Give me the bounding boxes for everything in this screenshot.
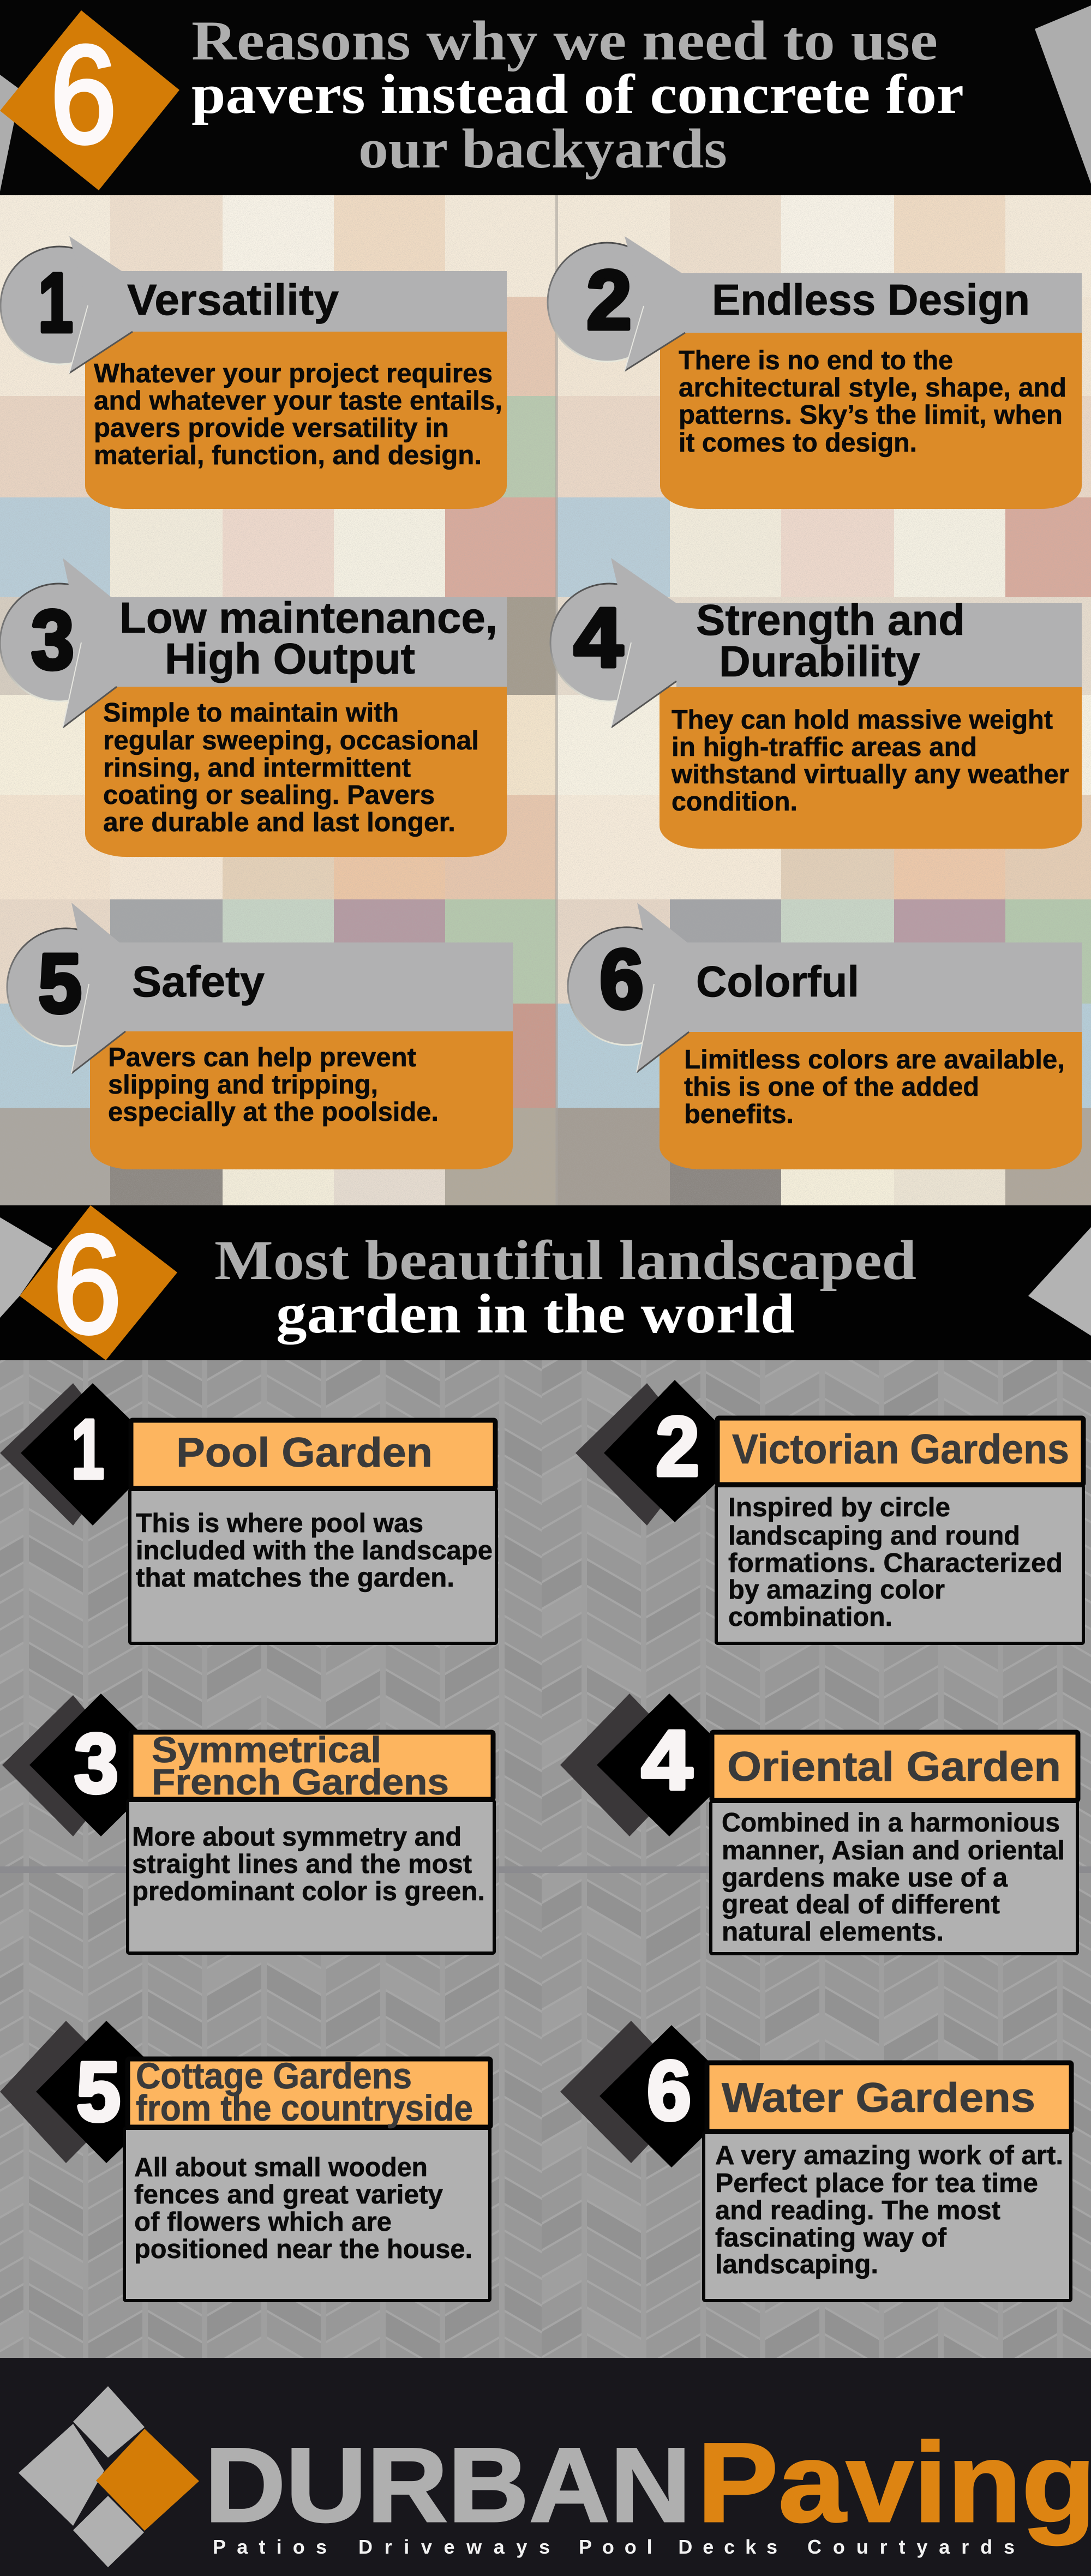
text block: great deal of different <box>722 1890 1000 1919</box>
header banner: 6 reasons <box>0 0 1091 195</box>
text block: Combined in a harmonious <box>722 1808 1060 1838</box>
decorative grey corner right <box>1028 1227 1091 1336</box>
text block: and whatever your taste entails, <box>94 386 502 416</box>
tagline: Courtyards <box>807 2536 1015 2558</box>
title: pavers instead of concrete for <box>191 63 964 125</box>
tile background: coloured pavers <box>0 195 1091 1207</box>
text block: manner, Asian and oriental <box>722 1836 1065 1865</box>
panel: garden 4 oriental garden <box>560 1694 1078 1954</box>
panel: garden 6 water gardens: Water Gardens <box>722 2075 1035 2121</box>
text block: gardens make use of a <box>722 1863 1008 1893</box>
icon: orange diamond with 6: 6 <box>50 17 117 172</box>
panel: garden 2 victorian gardens: Victorian Gardens <box>732 1426 1069 1473</box>
text block <box>679 346 1066 458</box>
text block <box>108 1043 439 1127</box>
text block <box>134 2153 472 2264</box>
panel: reason 5 safety: 5 <box>38 936 82 1030</box>
text block: landscaping and round <box>728 1521 1020 1551</box>
text block: benefits. <box>684 1100 794 1129</box>
panel: reason 6 colorful: Colorful <box>696 957 859 1006</box>
chevron paver background <box>0 1360 1091 2358</box>
panel: reason 4 strength and durability <box>550 558 1082 849</box>
title <box>191 10 964 180</box>
wordmark: DURBAN <box>205 2426 691 2544</box>
text block: natural elements. <box>722 1917 944 1947</box>
text block: are durable and last longer. <box>103 808 455 837</box>
text block: Inspired by circle <box>728 1493 950 1522</box>
panel: reason 4 strength and durability: Durability <box>719 637 921 686</box>
header banner: 6 gardens <box>0 1205 1091 1362</box>
panel: reason 3 low maintenance: 3 <box>31 593 74 687</box>
wordmark: Paving <box>697 2419 1091 2545</box>
title: garden in the world <box>276 1283 795 1345</box>
title: Reasons why we need to use <box>191 10 938 72</box>
panel: garden 5 cottage gardens <box>0 2021 490 2301</box>
text block <box>684 1045 1065 1129</box>
panel: garden 3 symmetrical french gardens <box>2 1694 494 1953</box>
footer: Durban Paving logo <box>0 2358 1091 2576</box>
text block: This is where pool was <box>136 1509 423 1538</box>
decorative grey corner left <box>0 75 21 191</box>
text block: positioned near the house. <box>134 2235 472 2264</box>
title: our backyards <box>358 118 727 180</box>
text block <box>728 1493 1063 1632</box>
text block: straight lines and the most <box>132 1850 472 1879</box>
title: Most beautiful landscaped <box>214 1229 916 1292</box>
text block: by amazing color <box>728 1575 945 1605</box>
panel: garden 2 victorian gardens <box>576 1380 1083 1643</box>
panel: reason 6 colorful: 6 <box>600 932 644 1026</box>
text block: it comes to design. <box>679 428 917 458</box>
panel: reason 3 low maintenance: Low maintenance, <box>119 593 497 642</box>
tagline: Pool Decks <box>579 2536 777 2558</box>
panel: garden 1 pool garden: Pool Garden <box>176 1430 433 1476</box>
text block: Simple to maintain with <box>103 698 399 728</box>
panel: garden 5 cottage gardens: from the countryside <box>136 2088 473 2129</box>
text block: combination. <box>728 1602 892 1632</box>
wordmark <box>205 2419 1091 2545</box>
text block <box>722 1808 1065 1947</box>
panel: garden 5 cottage gardens: Cottage Gardens <box>136 2056 412 2097</box>
text block: material, function, and design. <box>94 441 482 470</box>
panel: reason 1 versatility <box>1 236 507 509</box>
text block: fascinating way of <box>715 2223 947 2253</box>
panel: garden 3 symmetrical french gardens: 3 <box>74 1716 118 1810</box>
text block <box>671 705 1069 816</box>
text block <box>103 698 479 837</box>
text block: coating or sealing. Pavers <box>103 780 435 810</box>
panel: garden 6 water gardens: 6 <box>647 2044 691 2137</box>
text block: Whatever your project requires <box>94 359 493 388</box>
panel: garden 1 pool garden <box>0 1383 496 1643</box>
text block: landscaping. <box>715 2250 878 2279</box>
text block: More about symmetry and <box>132 1822 461 1852</box>
text block: All about small wooden <box>134 2153 428 2182</box>
panel: reason 2 endless design: 2 <box>586 253 632 347</box>
panel: reason 2 endless design: Endless Design <box>712 275 1030 324</box>
text block: Perfect place for tea time <box>715 2169 1038 2198</box>
panel: reason 6 colorful <box>568 903 1082 1169</box>
panel: garden 3 symmetrical french gardens: French Gardens <box>152 1762 449 1803</box>
panel: garden 4 oriental garden: Oriental Garden <box>727 1744 1061 1790</box>
text block <box>715 2141 1063 2279</box>
panel: reason 3 low maintenance: High Output <box>165 634 415 683</box>
tagline: Driveways <box>358 2536 550 2558</box>
text block: regular sweeping, occasional <box>103 726 479 755</box>
title <box>214 1229 916 1345</box>
decorative grey corner right <box>1035 5 1091 184</box>
tagline <box>213 2536 1015 2558</box>
text block: slipping and tripping, <box>108 1070 378 1100</box>
icon: orange diamond with 6 <box>0 10 179 190</box>
panel: garden 1 pool garden: 1 <box>71 1402 104 1496</box>
text block: fences and great variety <box>134 2180 443 2209</box>
text block: Pavers can help prevent <box>108 1043 416 1072</box>
text block: Limitless colors are available, <box>684 1045 1065 1074</box>
panel: reason 4 strength and durability: 4 <box>574 591 623 684</box>
tagline: Patios <box>213 2536 327 2558</box>
panel: garden 2 victorian gardens: 2 <box>656 1400 699 1493</box>
panel: reason 1 versatility: Versatility <box>127 275 339 324</box>
text block: withstand virtually any weather <box>671 760 1069 789</box>
panel: reason 5 safety: Safety <box>132 957 265 1006</box>
text block: pavers provide versatility in <box>94 413 449 443</box>
text block <box>132 1822 485 1906</box>
text block: and reading. The most <box>715 2196 1000 2225</box>
text block: formations. Characterized <box>728 1548 1063 1578</box>
text block: especially at the poolside. <box>108 1097 439 1127</box>
text block: in high-traffic areas and <box>672 732 977 762</box>
panel: garden 6 water gardens <box>560 2021 1071 2301</box>
icon: paver diamonds <box>19 2386 199 2567</box>
text block <box>136 1509 493 1593</box>
text block: included with the landscape <box>136 1536 493 1565</box>
text block: architectural style, shape, and <box>679 373 1066 403</box>
text block: There is no end to the <box>679 346 953 375</box>
text block: this is one of the added <box>684 1072 979 1102</box>
panel: reason 4 strength and durability: Strength and <box>696 596 965 644</box>
panel: reason 1 versatility: 1 <box>38 256 73 350</box>
panel: garden 5 cottage gardens: 5 <box>76 2045 121 2139</box>
icon: orange diamond with 6: 6 <box>53 1206 122 1362</box>
text block: They can hold massive weight <box>672 705 1053 735</box>
panel: garden 4 oriental garden: 4 <box>642 1713 692 1807</box>
text block: A very amazing work of art. <box>715 2141 1063 2170</box>
panel: garden 3 symmetrical french gardens: Symmetrical <box>152 1730 381 1770</box>
text block: that matches the garden. <box>136 1563 454 1593</box>
text block: rinsing, and intermittent <box>103 753 411 783</box>
text block <box>94 359 502 470</box>
icon: orange diamond with 6 <box>20 1205 177 1362</box>
panel: reason 5 safety <box>7 903 513 1169</box>
panel: reason 2 endless design <box>548 236 1082 509</box>
text block: patterns. Sky’s the limit, when <box>679 400 1063 430</box>
text block: predominant color is green. <box>132 1877 485 1906</box>
text block: of flowers which are <box>134 2207 392 2237</box>
decorative grey corner left <box>0 1217 52 1318</box>
text block: condition. <box>672 787 798 816</box>
panel: reason 3 low maintenance <box>0 558 507 857</box>
